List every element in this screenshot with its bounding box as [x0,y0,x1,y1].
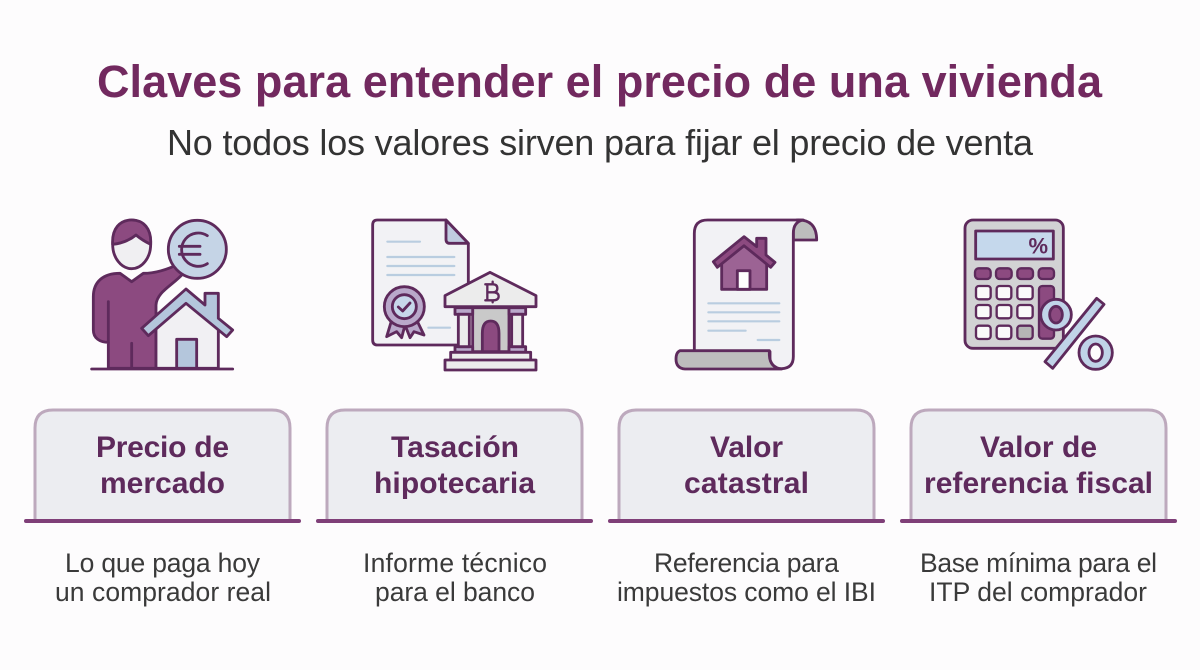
card: tasacion hipotecaria: hipotecaria [374,467,535,500]
card: valor de referencia fiscal: Valor de [980,431,1097,464]
icon: scroll with house [676,220,817,369]
text: precio de mercado description: un comprador real [55,577,271,607]
card: precio de mercado [26,410,299,521]
text: valor catastral description: impuestos como el IBI [617,577,876,607]
text: valor de referencia description: ITP del comprador [929,577,1147,607]
text: tasacion description: para el banco [375,577,535,607]
text: tasacion description [363,548,547,607]
title: Claves para entender el precio de una vivienda [97,56,1103,107]
subtitle: No todos los valores sirven para fijar el precio de venta [167,122,1034,163]
panel: tasacion hipotecaria [318,220,591,607]
panel: valor de referencia fiscal [902,220,1175,607]
text: valor de referencia description: Base mínima para el [920,548,1157,578]
text: valor catastral description [617,548,876,607]
icon: appraisal document and bank [373,220,536,370]
card: precio de mercado: Precio de [96,431,229,464]
card: tasacion hipotecaria [318,410,591,521]
card: valor de referencia fiscal [902,410,1175,521]
text: tasacion description: Informe técnico [363,548,547,578]
card: valor de referencia fiscal: referencia fiscal [924,467,1153,500]
card: tasacion hipotecaria: Tasación [391,431,519,464]
card: precio de mercado: mercado [100,467,225,500]
text: precio de mercado description: Lo que paga hoy [65,548,261,578]
card: valor catastral [610,410,883,521]
text: valor catastral description: Referencia para [654,548,839,578]
card: valor catastral: catastral [684,467,809,500]
icon: calculator with percent: % [1029,233,1048,258]
panel: valor catastral [610,220,883,607]
text: precio de mercado description [55,548,271,607]
icon: person with euro coin and house [92,220,233,369]
panel: precio de mercado [26,220,299,607]
card: valor catastral: Valor [710,431,783,464]
icon: calculator with percent [965,220,1112,369]
text: valor de referencia description [920,548,1157,607]
